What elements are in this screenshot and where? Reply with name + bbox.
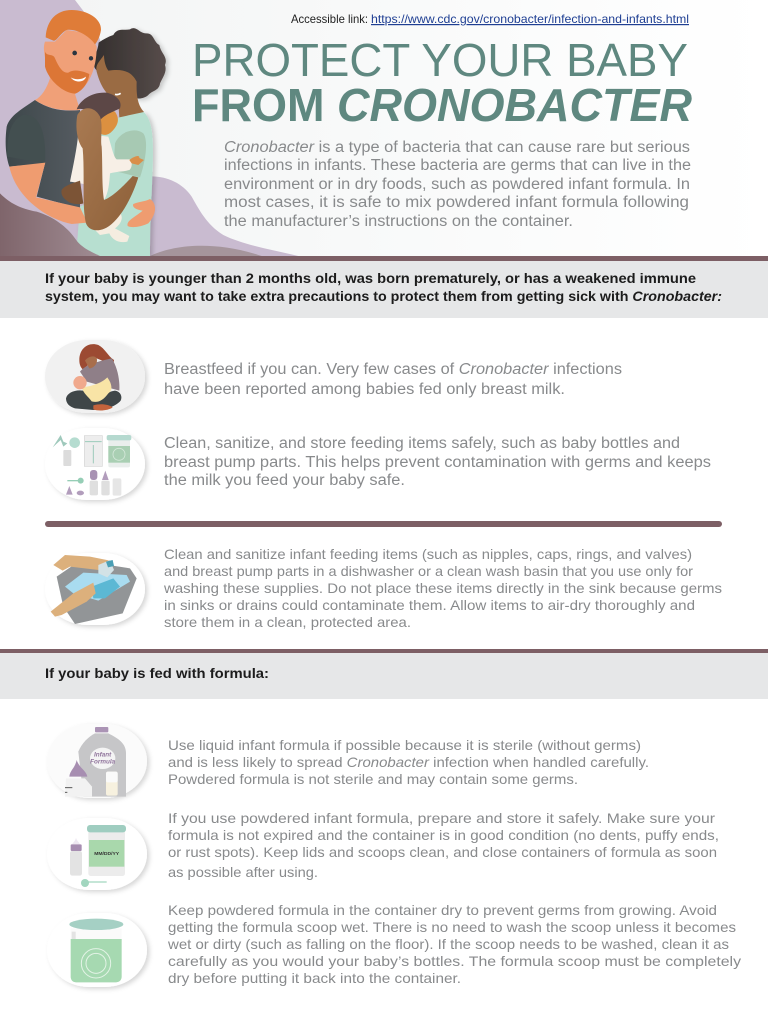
illustration: family [0, 0, 298, 256]
icon: infant formula jug: Formula [90, 759, 116, 766]
text: basin instructions: washing these supplies. Do not place these items directly in the sink because germs [163, 581, 722, 596]
title [192, 34, 692, 131]
woman's hair [94, 28, 166, 98]
icon: wash basin [45, 553, 145, 625]
man's eyes and smile [71, 77, 86, 82]
text: keep powdered formula dry: carefully as you would your baby’s bottles. The formula scoop must be completely [168, 954, 741, 969]
text: basin instructions: store them in a clean, protected area. [164, 615, 411, 630]
band: formula heading: If your baby is fed with formula: [45, 666, 269, 681]
text: keep powdered formula dry: Keep powdered formula in the container dry to prevent germs from growing. Avoid [168, 903, 717, 918]
foreground hill [0, 193, 100, 256]
woman's arm and hand [76, 108, 138, 230]
text: powdered formula: or rust spots). Keep lids and scoops clean, and close containers of formula as soon [168, 845, 717, 860]
woman's sleeve [113, 130, 146, 177]
text: keep powdered formula dry: dry before putting it back into the container. [168, 971, 461, 986]
icon: formula container with baby [47, 913, 147, 987]
baby face [98, 111, 118, 135]
text: liquid formula [168, 738, 649, 787]
man's shirt [6, 100, 80, 208]
text: breastfeed: have been reported among babies fed only breast milk. [164, 381, 565, 398]
icon: feeding items [45, 428, 145, 500]
woman's neck and face [96, 55, 144, 117]
woman's second hand [61, 181, 83, 204]
title: PROTECT YOUR BABY [192, 34, 688, 86]
baby legs and foot [95, 208, 129, 242]
text: liquid formula: Use liquid infant formula if possible because it is sterile (without germs) [168, 738, 641, 753]
woman's teal top [76, 112, 153, 256]
text: clean, sanitize, store: the milk you feed your baby safe. [164, 472, 405, 489]
icon: infant formula jug [47, 724, 147, 798]
intro paragraph: Cronobacter is a type of bacteria that can cause rare but serious [224, 139, 690, 156]
text: keep powdered formula dry [167, 903, 741, 986]
text: basin instructions [163, 547, 722, 630]
text: keep powdered formula dry: wet or dirty (such as falling on the floor). If the scoop needs to be washed, clean it as [167, 937, 729, 952]
man's hair [46, 10, 101, 44]
text: powdered formula: If you use powdered infant formula, prepare and store it safely. Make sure your [168, 811, 715, 826]
icon: formula container with date: MM/DD/YY [94, 851, 120, 857]
text: basin instructions: in sinks or drains could contaminate them. Allow items to air-dry thoroughly and [164, 598, 695, 613]
baby body [70, 133, 132, 200]
intro paragraph: most cases, it is safe to mix powdered infant formula following [224, 194, 689, 211]
text: clean, sanitize, store [164, 435, 711, 489]
intro paragraph: environment or in dry foods, such as powdered infant formula. In [224, 176, 690, 193]
band: formula heading [0, 649, 768, 699]
divider bar [45, 521, 722, 527]
text: powdered formula [168, 811, 719, 880]
band: precautions heading: If your baby is younger than 2 months old, was born prematurely, or has a weakened immune [45, 271, 696, 286]
accessible link: https://www.cdc.gov/cronobacter/infection-and-infants.html [371, 12, 689, 26]
text: liquid formula: Powdered formula is not sterile and may contain some germs. [168, 772, 578, 787]
band: precautions heading: system, you may want to take extra precautions to protect them from getting sick with Cronobacter: [45, 289, 722, 304]
text: keep powdered formula dry: getting the formula scoop wet. There is no need to wash the scoop unless it becomes [168, 920, 736, 935]
text: powdered formula: as possible after using. [168, 865, 318, 880]
icon: breastfeeding [45, 340, 145, 413]
text: breastfeed: Breastfeed if you can. Very few cases of Cronobacter infections [164, 361, 622, 378]
intro paragraph: infections in infants. These bacteria are germs that can live in the [224, 157, 691, 174]
header background [0, 0, 768, 256]
text: breastfeed [164, 361, 622, 398]
intro paragraph: the manufacturer’s instructions on the container. [224, 213, 573, 230]
accessible link: Accessible link: [291, 12, 368, 26]
baby hand [129, 156, 144, 165]
man's arm and right hand [9, 163, 87, 224]
text: liquid formula: and is less likely to spread Cronobacter infection when handled carefully. [168, 755, 649, 770]
baby hair [77, 93, 121, 121]
text: basin instructions: and breast pump parts in a dishwasher or a clean wash basin that you use only for [164, 564, 693, 579]
text: basin instructions: Clean and sanitize infant feeding items (such as nipples, caps, rings, and valves) [164, 547, 692, 562]
intro paragraph [224, 139, 691, 230]
title: FROM CRONOBACTER [192, 79, 692, 131]
band: precautions heading [0, 256, 768, 318]
icon: formula container with date [47, 818, 147, 890]
text: clean, sanitize, store: Clean, sanitize, and store feeding items safely, such as baby bottles and [164, 435, 680, 452]
text: clean, sanitize, store: breast pump parts. This helps prevent contamination with germs and keeps [164, 454, 711, 471]
text: powdered formula: formula is not expired and the container is in good condition (no dents, puffy ends, [168, 828, 719, 843]
man's head and neck [35, 30, 97, 110]
icon: infant formula jug: Infant [94, 752, 112, 759]
man's beard [45, 52, 89, 94]
